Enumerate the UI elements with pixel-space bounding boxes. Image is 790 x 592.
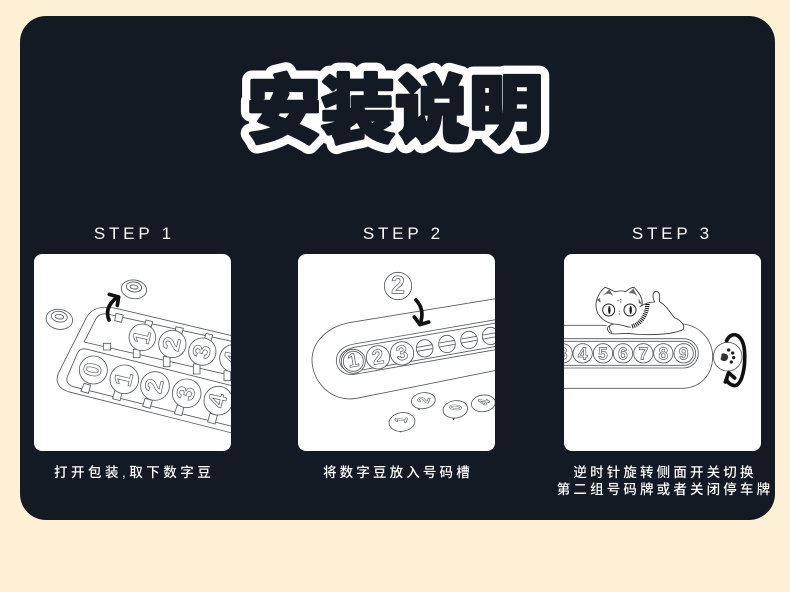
loose digit beans: 2 bbox=[413, 396, 434, 404]
seated beans 3 to 9: 8 bbox=[659, 343, 669, 363]
digit beans: 0 bbox=[79, 360, 108, 380]
digit beans: 2 bbox=[158, 334, 187, 354]
caption: step 1: 打开包装,取下数字豆 bbox=[54, 465, 214, 480]
panel: step 1 illustration bbox=[34, 254, 231, 451]
arrow: bean removal bbox=[108, 294, 119, 320]
number plate bbox=[547, 324, 713, 388]
seated beans 3 to 9: 6 bbox=[618, 343, 628, 363]
falling bean 2: 2 bbox=[391, 272, 405, 300]
panel: step 3 illustration bbox=[564, 254, 761, 451]
icon: cat lying on plate bbox=[596, 287, 684, 335]
seated beans 3 to 9: 9 bbox=[679, 343, 688, 363]
loose digit beans: 1 bbox=[392, 416, 412, 424]
seated beans 3 to 9: 7 bbox=[639, 343, 648, 363]
loose beans bbox=[44, 278, 148, 331]
number plate bbox=[312, 298, 498, 399]
heading: step 1: STEP 1 bbox=[94, 224, 175, 243]
empty slots bbox=[416, 327, 499, 357]
falling bean 2 bbox=[384, 272, 412, 300]
heading: step 3: STEP 3 bbox=[632, 224, 713, 243]
seated beans 3 to 9: 4 bbox=[578, 343, 588, 363]
seated beans: 3 bbox=[394, 341, 410, 366]
caption: step 3: 逆时针旋转侧面开关切换 bbox=[573, 465, 757, 480]
arrow: rotate switch bbox=[725, 335, 745, 386]
seated beans 3 to 9 bbox=[553, 343, 693, 363]
heading: step 2: STEP 2 bbox=[363, 224, 444, 243]
digit beans: 1 bbox=[110, 369, 139, 389]
caption: step 2: 将数字豆放入号码槽 bbox=[323, 465, 473, 480]
caption: step 3 bbox=[557, 465, 773, 497]
arrow: insert bean bbox=[414, 300, 429, 325]
digit beans: 3 bbox=[172, 384, 201, 403]
icon: paw switch bbox=[713, 342, 742, 371]
seated beans: 1 bbox=[346, 350, 361, 373]
seated beans: 2 bbox=[370, 345, 386, 370]
seated beans 3 to 9: 5 bbox=[598, 343, 608, 363]
loose digit beans: 4 bbox=[473, 398, 494, 406]
digit beans: 2 bbox=[140, 376, 170, 396]
digit beans bbox=[79, 324, 248, 415]
caption: step 3: 第二组号码牌或者关闭停车牌 bbox=[557, 482, 773, 497]
digit beans: 3 bbox=[188, 342, 217, 361]
panel: step 2 illustration bbox=[298, 254, 495, 451]
seated beans bbox=[341, 341, 414, 373]
digit beans: 1 bbox=[128, 328, 157, 347]
loose digit beans: 0 bbox=[445, 403, 466, 411]
loose digit beans bbox=[388, 391, 496, 433]
bean sprue frame bbox=[57, 307, 233, 433]
